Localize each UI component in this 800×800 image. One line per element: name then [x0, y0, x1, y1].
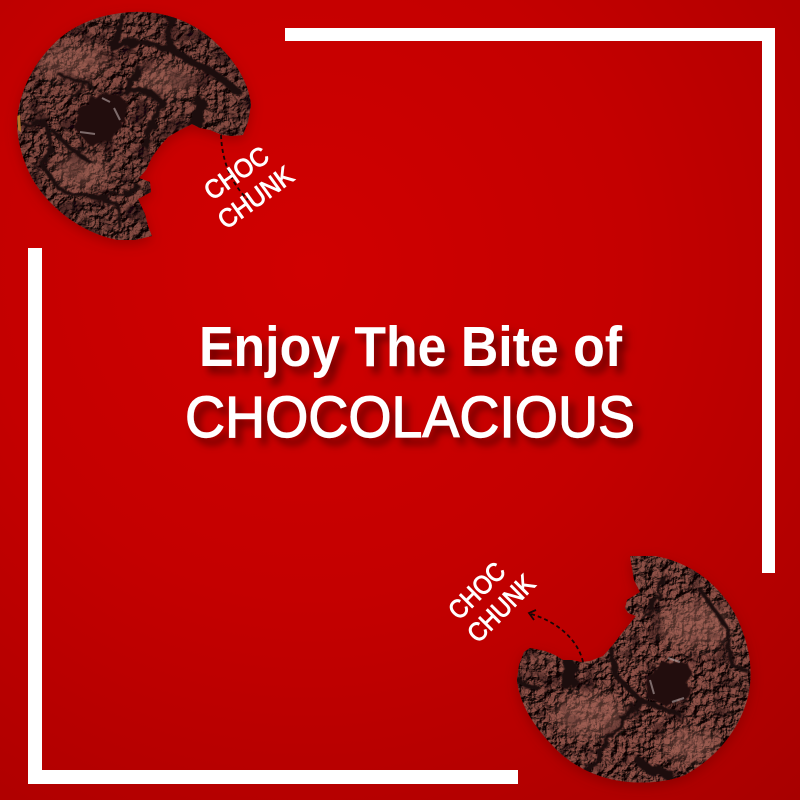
headline: CHOCOLACIOUS	[185, 385, 635, 450]
label: top choc chunk: CHUNK	[212, 160, 300, 235]
chocolate chunk	[76, 94, 128, 144]
label: bottom choc chunk: CHOC	[442, 556, 511, 625]
white frame: bottom left	[28, 248, 518, 784]
arrow: top cookie to label	[221, 135, 248, 200]
chocolate chunk	[645, 658, 692, 705]
cookie: top left	[10, 5, 260, 250]
label: bottom choc chunk: CHUNK	[461, 568, 541, 648]
cookie: bottom right	[510, 550, 760, 790]
headline: Enjoy The Bite of	[199, 315, 623, 379]
label: top choc chunk	[198, 140, 300, 235]
label: top choc chunk: CHOC	[198, 140, 274, 206]
arrow: bottom cookie to label	[529, 610, 583, 662]
headline	[185, 315, 635, 450]
white frame: top right	[285, 28, 775, 573]
